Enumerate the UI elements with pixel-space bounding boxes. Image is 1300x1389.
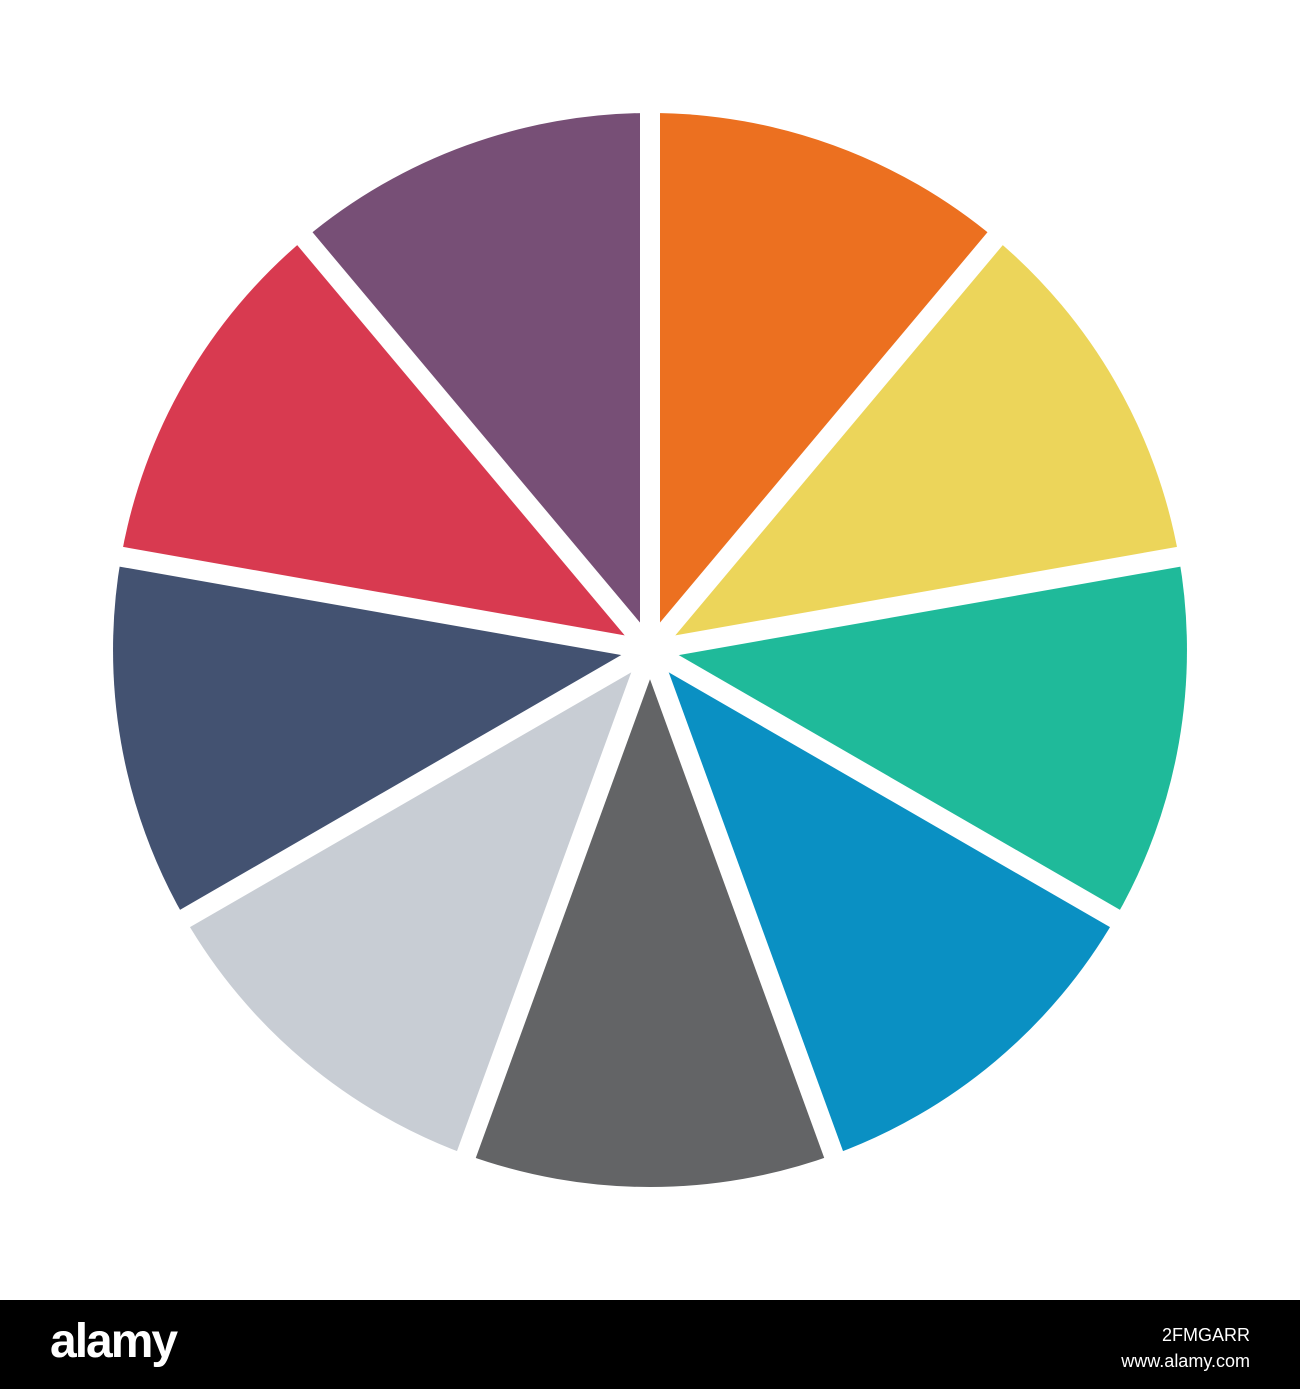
footer bar bbox=[0, 1300, 1300, 1389]
slice: navy bbox=[113, 557, 650, 918]
slice: orange bbox=[650, 113, 995, 650]
footer image id: www.alamy.com bbox=[1121, 1351, 1250, 1371]
slice: dark gray bbox=[466, 650, 834, 1187]
slice: teal bbox=[650, 557, 1187, 918]
footer logo: alamy bbox=[50, 1315, 176, 1368]
slice: purple bbox=[305, 113, 650, 650]
slice: light gray bbox=[185, 650, 650, 1155]
footer image id bbox=[1121, 1325, 1250, 1371]
slice: blue bbox=[650, 650, 1115, 1155]
footer image id: 2FMGARR bbox=[1162, 1325, 1250, 1345]
slice: red bbox=[121, 239, 650, 650]
slice: yellow bbox=[650, 239, 1179, 650]
